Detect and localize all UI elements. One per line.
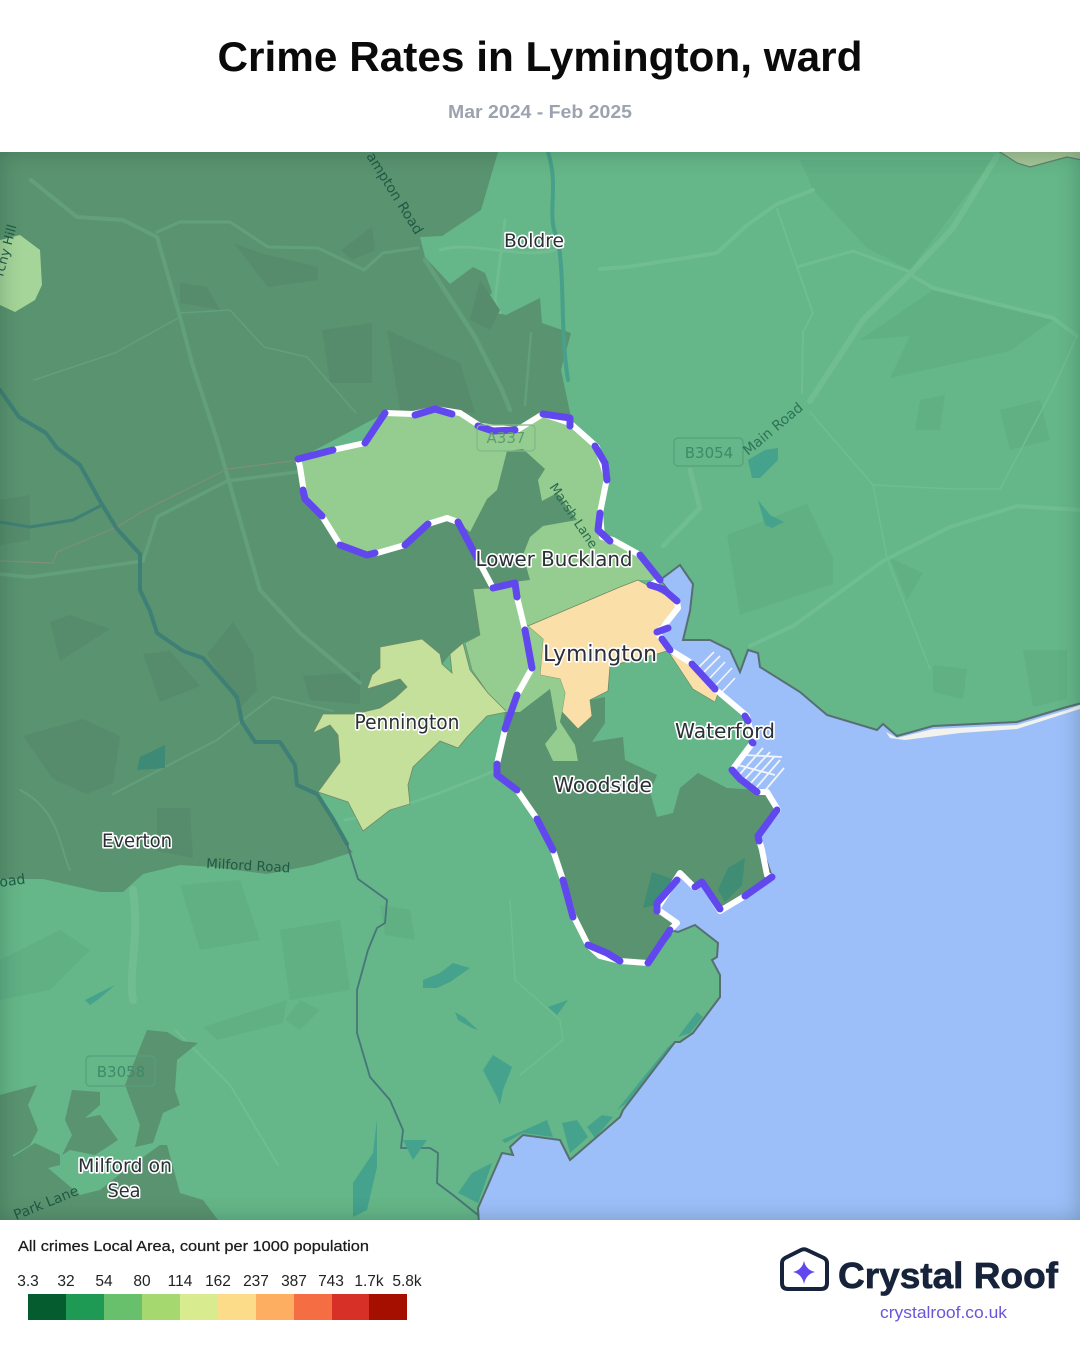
legend tick labels: 5.8k [392,1273,422,1290]
rivers [0,152,568,1215]
logo: Crystal Roof [782,1249,1059,1322]
subtitle: date range: Mar 2024 - Feb 2025 [448,102,632,122]
legend tick labels: 114 [168,1273,193,1290]
icon: house with star [782,1249,827,1289]
road shield: A337: A337 [487,429,525,447]
marina: north pontoons [698,652,735,692]
road label: Milford Road: Milford Road [206,856,291,876]
marina: south pontoons [737,746,785,789]
legend tick labels: 387 [281,1273,307,1290]
legend tick labels: 1.7k [354,1273,384,1290]
road shield: B3054 [674,438,743,466]
title: Crime Rates in Lymington, ward [218,33,862,80]
road label: Hampton Road: ampton Road [363,150,426,238]
road shield: B3058 [86,1056,155,1086]
road label: Marsh Lane: Marsh Lane [546,481,600,552]
Light green area west of ward centre [465,583,532,712]
legend tick labels: 80 [133,1273,151,1290]
ward: Woodside dark area [497,689,778,963]
road shield: B3058: B3058 [97,1063,145,1081]
white shoreline sliver [886,705,1080,740]
legend tick labels: 3.3 [17,1273,39,1290]
road shield: B3054: B3054 [685,444,733,462]
lakes [85,448,784,1217]
place label: Waterford: Waterford [675,719,775,743]
dark area roads [0,180,531,870]
place label: Milford on Sea [78,1155,172,1202]
place label: Milford on Sea: Milford on [78,1155,172,1177]
wordmark: Crystal Roof [838,1255,1059,1296]
place label: Lower Buckland: Lower Buckland [476,547,632,571]
website url: crystalroof.co.uk [880,1303,1008,1322]
place label: Milford on Sea: Sea [108,1180,140,1202]
road label: Main Road: Main Road [740,400,807,459]
map edge shading [0,152,1080,1220]
ward boundary: white [298,409,778,963]
legend colour scale [28,1294,407,1320]
base area roads [132,156,1080,1165]
Pennington area [313,639,507,831]
pale area, top right corner [999,152,1080,168]
road label: Park Lane: Park Lane [12,1183,81,1224]
ward: dark patch north of Lower Buckland [458,449,577,588]
place label: Pennington: Pennington [354,710,460,734]
dark low-crime area: north-west [0,152,571,892]
ward: light green patch by Woodside [505,626,578,761]
place label: Boldre: Boldre [504,230,564,252]
Milford on Sea dark areas [0,1030,218,1220]
ward: teal wood patches [643,858,745,942]
legend tick labels: 237 [243,1273,269,1290]
ward: Lower Buckland light green [298,409,660,626]
place label: Everton: Everton [102,830,172,852]
ward: Lymington town centre [528,580,677,729]
legend tick labels: 743 [318,1273,344,1290]
legend title: All crimes Local Area, count per 1000 population [18,1238,369,1255]
base area texture patches [0,160,1067,1040]
legend tick labels [17,1273,422,1290]
legend tick labels: 32 [57,1273,75,1290]
Pale area, far left [0,235,42,312]
ward: base fill [312,410,748,735]
ward boundary: purple dashes [298,409,777,963]
road shield: A337 [477,425,535,451]
legend [17,1238,422,1320]
place label: Woodside: Woodside [554,773,652,797]
legend tick labels: 162 [205,1273,231,1290]
place label: Lymington: Lymington [543,642,657,667]
map [0,150,1080,1225]
dark area texture [481,295,500,314]
sea [478,565,1080,1225]
legend tick labels: 54 [95,1273,113,1290]
ward: Lymington shore strip [670,654,718,702]
